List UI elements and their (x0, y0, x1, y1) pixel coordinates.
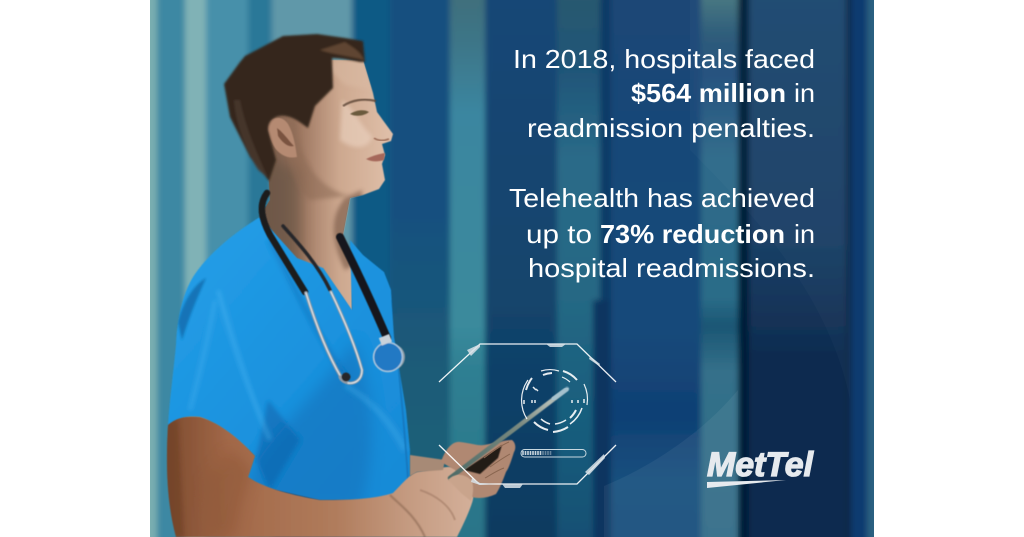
far hand (441, 440, 515, 498)
eye (350, 110, 369, 116)
frame accents (467, 344, 605, 488)
telehealth statement: up to (526, 219, 592, 249)
telehealth statement (509, 183, 815, 283)
lips (366, 153, 385, 161)
eyebrow (343, 100, 376, 106)
tablet (450, 389, 567, 478)
far forearm (410, 455, 445, 476)
circular gauge (522, 370, 587, 432)
stethoscope (262, 193, 387, 383)
photo panel: blurred corridor background (140, 0, 900, 537)
telehealth statement: in (794, 219, 815, 249)
MetTel logo: MetTel (707, 446, 815, 484)
holographic interface overlay (439, 344, 616, 488)
stethoscope chestpiece (374, 334, 405, 372)
penalties statement (513, 44, 815, 143)
interface frame (439, 344, 616, 484)
hair (224, 34, 365, 181)
penalties statement: readmission penalties. (527, 113, 815, 143)
head and neck skin (258, 60, 393, 312)
nurse figure (160, 34, 567, 537)
telehealth statement: 73% reduction (600, 219, 785, 249)
headline copy (509, 44, 815, 283)
tubes (262, 193, 305, 292)
ear (267, 118, 297, 158)
telehealth statement: Telehealth has achieved (509, 183, 815, 213)
scrubs (168, 217, 410, 510)
silver binaurals (306, 293, 341, 377)
telehealth statement: hospital readmissions. (528, 253, 815, 283)
penalties statement: in (794, 78, 815, 108)
penalties statement: $564 million (631, 78, 786, 108)
tablet tip over gauge (553, 389, 567, 399)
nostril (374, 138, 389, 140)
near hand fingers (448, 475, 473, 501)
penalties statement: In 2018, hospitals faced (513, 44, 815, 74)
progress bar (521, 450, 586, 457)
arm and hand (160, 417, 474, 537)
